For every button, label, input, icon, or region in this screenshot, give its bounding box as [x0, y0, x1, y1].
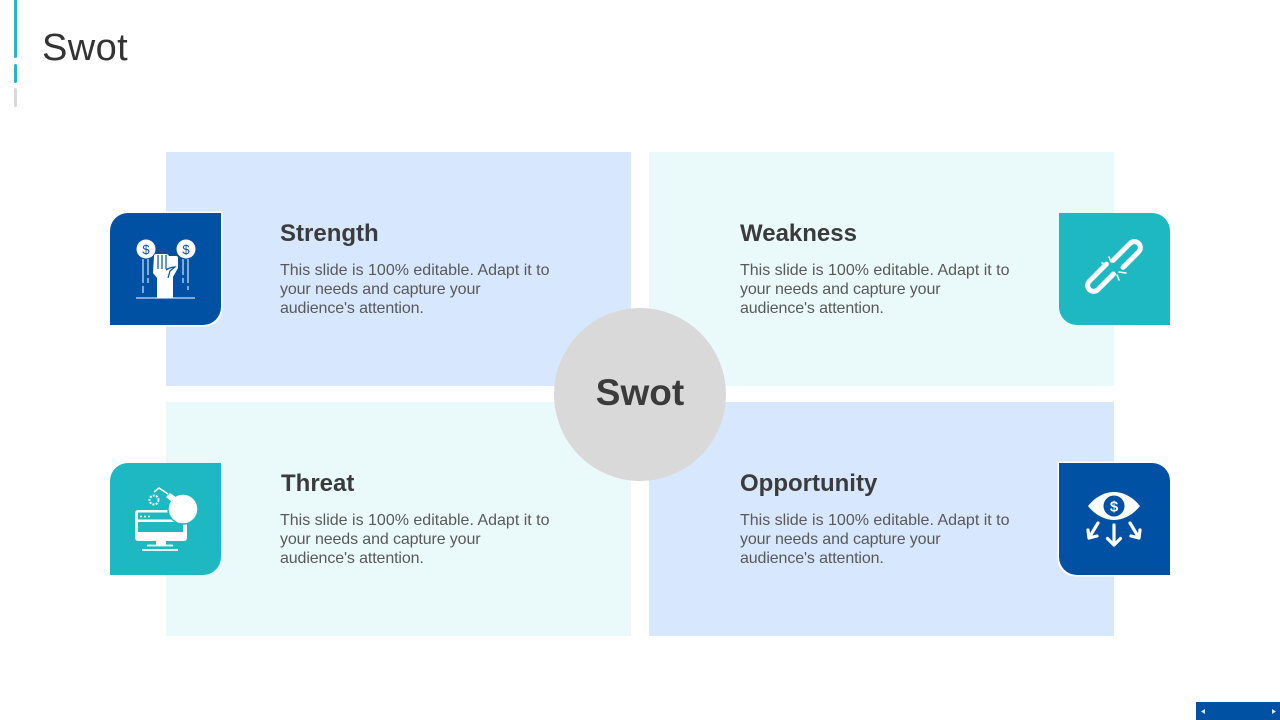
text: strength: your needs and capture your: [280, 281, 480, 298]
decorative accent bar: bottom: [14, 88, 17, 107]
panel: strength: [166, 152, 631, 386]
text: weakness: [740, 262, 1010, 317]
icon tile: strength, raised fist with dollar coins: [110, 213, 221, 325]
text: threat: This slide is 100% editable. Adapt it to: [280, 512, 550, 529]
text: weakness: audience's attention.: [740, 300, 884, 317]
decorative accent bar: top: [14, 0, 17, 58]
icon tile: strength, raised fist with dollar coins: $: [142, 242, 150, 257]
text: strength: audience's attention.: [280, 300, 424, 317]
navigation bar: [1196, 702, 1280, 720]
icon tile: opportunity, eye with dollar and arrows: $: [1110, 498, 1119, 516]
panel: threat: [166, 402, 631, 636]
center circle: [554, 308, 726, 481]
panel: opportunity: [649, 402, 1114, 636]
icon tile: opportunity, eye with dollar and arrows: [1059, 463, 1170, 575]
icon tile: threat, computer with bomb: [110, 463, 221, 575]
heading: strength: Strength: [280, 220, 379, 247]
text: opportunity: audience's attention.: [740, 550, 884, 567]
text: strength: [280, 262, 550, 317]
panel: weakness: [649, 152, 1114, 386]
text: weakness: This slide is 100% editable. Adapt it to: [740, 262, 1010, 279]
text: strength: This slide is 100% editable. Adapt it to: [280, 262, 550, 279]
text: opportunity: [740, 512, 1010, 567]
text: threat: audience's attention.: [280, 550, 424, 567]
center label: Swot: [596, 372, 684, 413]
title: Swot: [42, 27, 128, 69]
heading: opportunity: Opportunity: [740, 470, 877, 497]
text: opportunity: your needs and capture your: [740, 531, 940, 548]
icon tile: weakness, broken chain: [1059, 213, 1170, 325]
text: threat: your needs and capture your: [280, 531, 480, 548]
text: threat: [280, 512, 550, 567]
text: weakness: your needs and capture your: [740, 281, 940, 298]
text: opportunity: This slide is 100% editable. Adapt it to: [740, 512, 1010, 529]
heading: weakness: Weakness: [740, 220, 857, 247]
decorative accent bar: middle: [14, 64, 17, 83]
icon tile: strength, raised fist with dollar coins: $: [182, 242, 190, 257]
heading: threat: Threat: [281, 470, 354, 497]
